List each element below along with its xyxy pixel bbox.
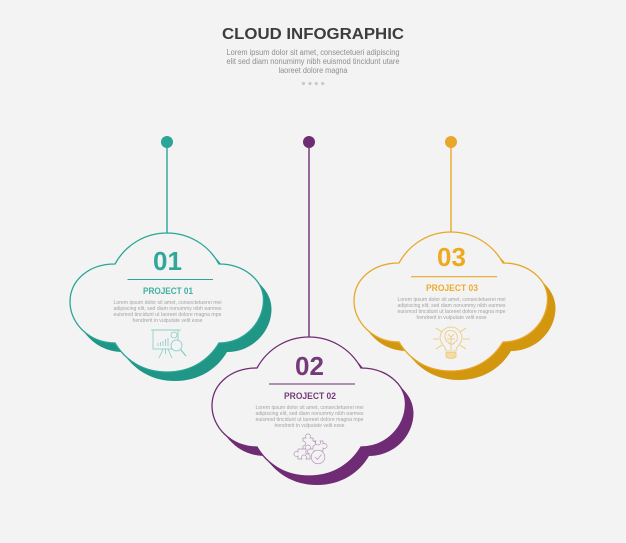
subtitle text: elit sed diam nonumimy nibh euismod tincidunt utare <box>226 57 400 66</box>
body text 01 <box>114 300 222 324</box>
panel: project 02 <box>212 136 414 485</box>
body text 02: hendrerit in vulputate velit esse <box>274 423 344 429</box>
subtitle text: Lorem ipsum dolor sit amet, consectetueri adipiscing <box>226 48 400 57</box>
heading: project 03: PROJECT 03 <box>426 283 478 293</box>
heading: project 01: PROJECT 01 <box>143 286 193 296</box>
body text 03: Lorem ipsum dolor sit amet, consectetuerei mei <box>398 297 506 303</box>
body text 01: Lorem ipsum dolor sit amet, consectetuerei mei <box>114 300 222 306</box>
connector: project 01 <box>161 136 173 234</box>
icon: light bulb with brain <box>433 327 470 358</box>
connector: project 03 <box>445 136 457 233</box>
connector: project 02 <box>303 136 315 338</box>
number 02: 02 <box>295 351 324 381</box>
body text 02: euismod tincidunt ut laoreet dolore magna mpe <box>256 417 364 423</box>
number 01: 01 <box>153 246 182 276</box>
cloud: project 03 <box>354 232 556 380</box>
cloud: project 01 <box>70 233 272 381</box>
divider 03 <box>411 276 497 278</box>
body text 03: euismod tincidunt ut laoreet dolore magna mpe <box>398 309 506 315</box>
divider 01 <box>128 278 213 280</box>
subtitle text: laoreet dolore magna <box>278 66 348 75</box>
icon: puzzle with check <box>294 434 327 464</box>
body text 02: Lorem ipsum dolor sit amet, consectetuerei mei <box>256 405 364 411</box>
body text 03 <box>398 297 506 321</box>
pagination dots <box>302 82 324 85</box>
divider 02 <box>269 383 355 385</box>
body text 02 <box>256 405 364 429</box>
body text 01: hendrerit in vulputate velit esse <box>132 318 202 324</box>
panel: project 03 <box>354 136 556 380</box>
body text 01: euismod tincidunt ut laoreet dolore magna mpe <box>114 312 222 318</box>
panel: project 01 <box>70 136 272 381</box>
number 03: 03 <box>437 242 466 272</box>
body text 01: adipiscing elit, sed diam nonummy nibh earmes <box>114 306 222 312</box>
cloud: project 02 <box>212 337 414 485</box>
body text 03: hendrerit in vulputate velit esse <box>416 315 486 321</box>
heading: project 02: PROJECT 02 <box>284 391 336 401</box>
icon: presentation board with magnifier <box>151 330 186 358</box>
body text 02: adipiscing elit, sed diam nonummy nibh earmes <box>256 411 364 417</box>
subtitle text <box>226 48 400 75</box>
title: CLOUD INFOGRAPHIC <box>222 26 404 43</box>
body text 03: adipiscing elit, sed diam nonummy nibh earmes <box>398 303 506 309</box>
